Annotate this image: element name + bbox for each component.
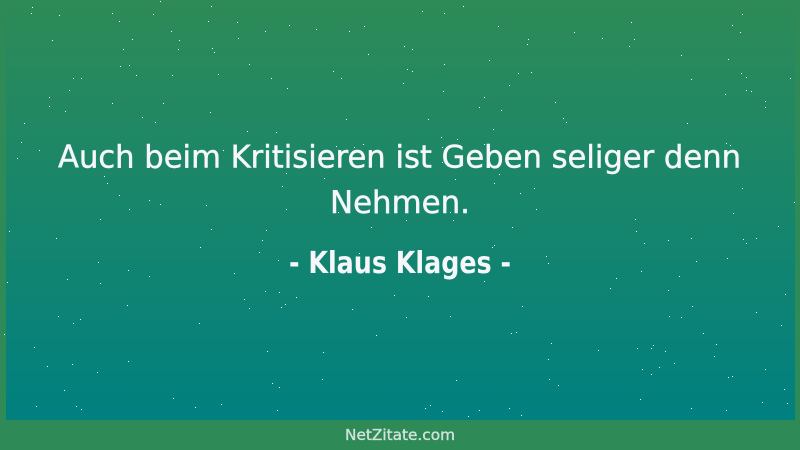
footer brand: NetZitate.com	[345, 426, 455, 444]
author: - Klaus Klages -	[289, 246, 511, 281]
quote line 2: Nehmen.	[330, 185, 470, 221]
quote line 1: Auch beim Kritisieren ist Geben seliger denn	[58, 140, 741, 176]
quote text	[58, 140, 741, 221]
